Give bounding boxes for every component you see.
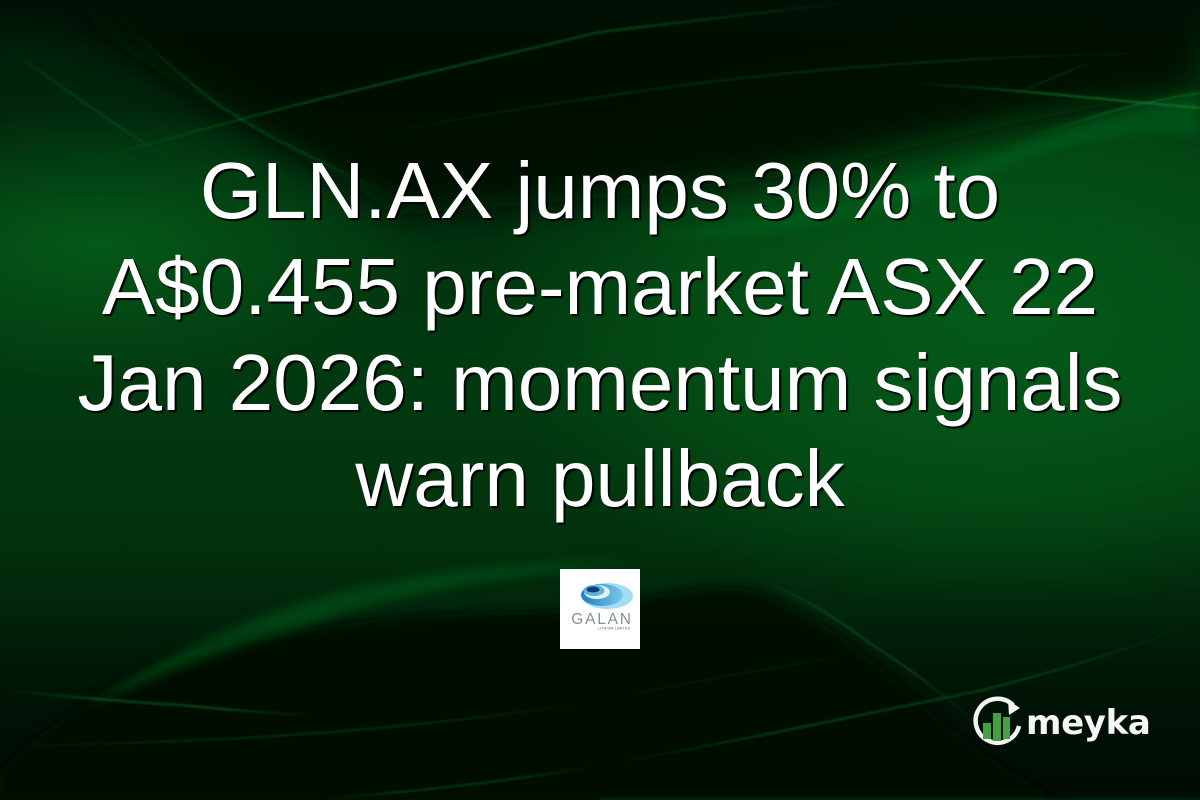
company logo: Galan Lithium: LITHIUM LIMITED [598, 626, 631, 630]
wordmark: meyka [1026, 703, 1150, 743]
dark upper wedge [60, 0, 1200, 215]
dark lower shape [0, 588, 1060, 800]
right light wave band [640, 93, 1200, 236]
company logo: Galan Lithium: GALAN [571, 611, 633, 628]
lower light band above dark shape [90, 562, 640, 705]
icon: growth ring with bars [976, 699, 1020, 743]
meyka brand logo [973, 696, 1150, 746]
top edge fade [0, 0, 1200, 50]
title: GLN.AX jumps 30% to A$0.455 pre-market ASX 22 Jan 2026: momentum signals warn pullback [78, 146, 1122, 523]
company logo: Galan Lithium [560, 569, 640, 649]
bottom fade across full width [0, 610, 1200, 800]
